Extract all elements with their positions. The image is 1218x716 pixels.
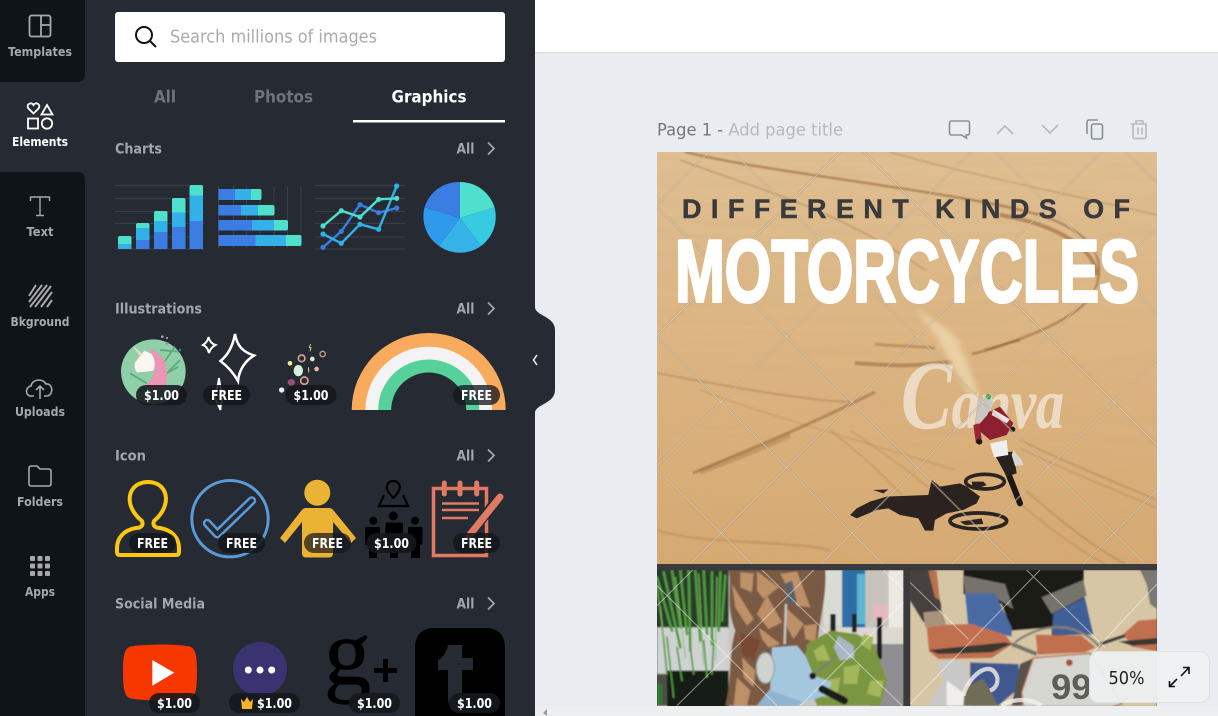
section heading: Illustrations: [115, 302, 494, 318]
nav: Elements: Elements: [12, 134, 68, 149]
illustration: rainbow: [352, 333, 506, 410]
page header: Page 1 - Add page title: [657, 120, 843, 140]
nav: Folders: Folders: [17, 494, 63, 509]
icon: person solid: [280, 480, 356, 558]
watermark: Canva: Canva: [901, 342, 1064, 450]
section heading: Charts: Charts: [115, 142, 162, 158]
section heading: Icon: Icon: [115, 448, 146, 464]
editor workspace background: [535, 0, 1218, 716]
poster subtitle: DIFFERENT KINDS OF: [682, 194, 1130, 224]
section heading: Charts: All: [456, 142, 474, 158]
nav: Apps: [25, 556, 55, 599]
illustration: unicorn: [121, 335, 186, 404]
section heading: Social Media: [115, 596, 494, 612]
tabs: Photos: [254, 88, 313, 108]
price badges: social media: $1.00: [157, 697, 192, 712]
price badges: illustrations: $1.00: [144, 389, 179, 404]
icon: YouTube: [123, 644, 197, 700]
tabs: [154, 88, 505, 122]
stacked column chart: [115, 185, 204, 249]
pie chart: [423, 182, 496, 253]
icon: Google Plus: [324, 601, 397, 705]
poster page: [657, 152, 1157, 707]
icon: move up: [997, 126, 1013, 134]
photo: rider with number plate: 99: [1051, 668, 1092, 707]
nav: Background: Bkground: [10, 314, 70, 329]
section heading: Illustrations: All: [456, 302, 474, 318]
nav: Uploads: Uploads: [15, 404, 65, 419]
motorcycle shadow: [850, 474, 1007, 531]
side panel: [85, 0, 535, 716]
icon: comment: [950, 121, 970, 138]
price badges: illustrations: [136, 385, 500, 405]
icon: user outline: [117, 482, 179, 555]
price badges: icons: [129, 533, 500, 553]
icon: purple menu circle: [233, 642, 287, 696]
nav: Apps: Apps: [25, 584, 55, 599]
nav: Templates: [8, 16, 72, 59]
photo: blue scooter and palm tree: [657, 570, 904, 707]
left navigation rail: [0, 0, 85, 716]
nav: Text: Text: [26, 224, 54, 239]
price badges: social media: [149, 693, 500, 713]
icon: Google Plus: g: [324, 601, 371, 705]
price badges: icons: FREE: [226, 537, 257, 552]
zoom control: [1090, 652, 1210, 702]
price badges: social media: $1.00: [357, 697, 392, 712]
nav: Uploads: [15, 380, 65, 419]
nav: Folders: [17, 466, 63, 509]
price badges: illustrations: FREE: [461, 389, 492, 404]
illustration: confetti dots: [279, 344, 325, 393]
price badges: social media: $1.00: [457, 697, 492, 712]
price badges: illustrations: FREE: [211, 389, 242, 404]
search box: Search millions of images: [170, 28, 377, 48]
section heading: Icon: [115, 448, 494, 464]
illustration: sparkles: [203, 334, 254, 410]
line chart: [315, 183, 405, 250]
diamond overlay pattern: [657, 152, 1157, 564]
section heading: Icon: All: [456, 448, 474, 464]
page header: [657, 120, 1147, 140]
nav: Background: [10, 285, 70, 329]
motorcycle rider: [973, 394, 1023, 503]
bottom scroll strip: [535, 706, 1218, 716]
nav: Text: [26, 197, 54, 239]
zoom control: 50%: [1108, 668, 1144, 689]
price badges: icons: FREE: [461, 537, 492, 552]
icon: duplicate: [1087, 120, 1102, 139]
price badges: social media: $1.00: [257, 697, 292, 712]
price badges: icons: FREE: [312, 537, 343, 552]
photo: rider with number plate: [910, 570, 1157, 707]
search box: [115, 12, 505, 62]
icon: Tumblr: [415, 628, 505, 716]
tabs: All: [154, 88, 176, 108]
icon: trash: [1131, 121, 1147, 138]
nav: Templates: Templates: [8, 44, 72, 59]
panel collapse handle: [534, 307, 555, 413]
price badges: icons: $1.00: [374, 537, 409, 552]
nav: Elements: [12, 103, 68, 149]
price badges: icons: FREE: [137, 537, 168, 552]
tabs: Graphics: [392, 88, 466, 108]
section heading: Illustrations: Illustrations: [115, 302, 202, 318]
section heading: Social Media: All: [456, 596, 474, 612]
price badges: illustrations: $1.00: [294, 389, 328, 404]
top bar: [535, 0, 1218, 53]
horizontal stacked bar chart: [218, 186, 302, 248]
section heading: Social Media: Social Media: [115, 596, 205, 612]
icon: team with map pin: [365, 481, 422, 558]
photo grid divider: [657, 564, 1157, 706]
section heading: Charts: [115, 142, 494, 158]
icon: move down: [1042, 125, 1058, 133]
icon: check circle: [192, 480, 268, 557]
photo: desert sand with motorcycle: [657, 152, 1157, 564]
icon: notepad and pencil: [434, 483, 500, 556]
